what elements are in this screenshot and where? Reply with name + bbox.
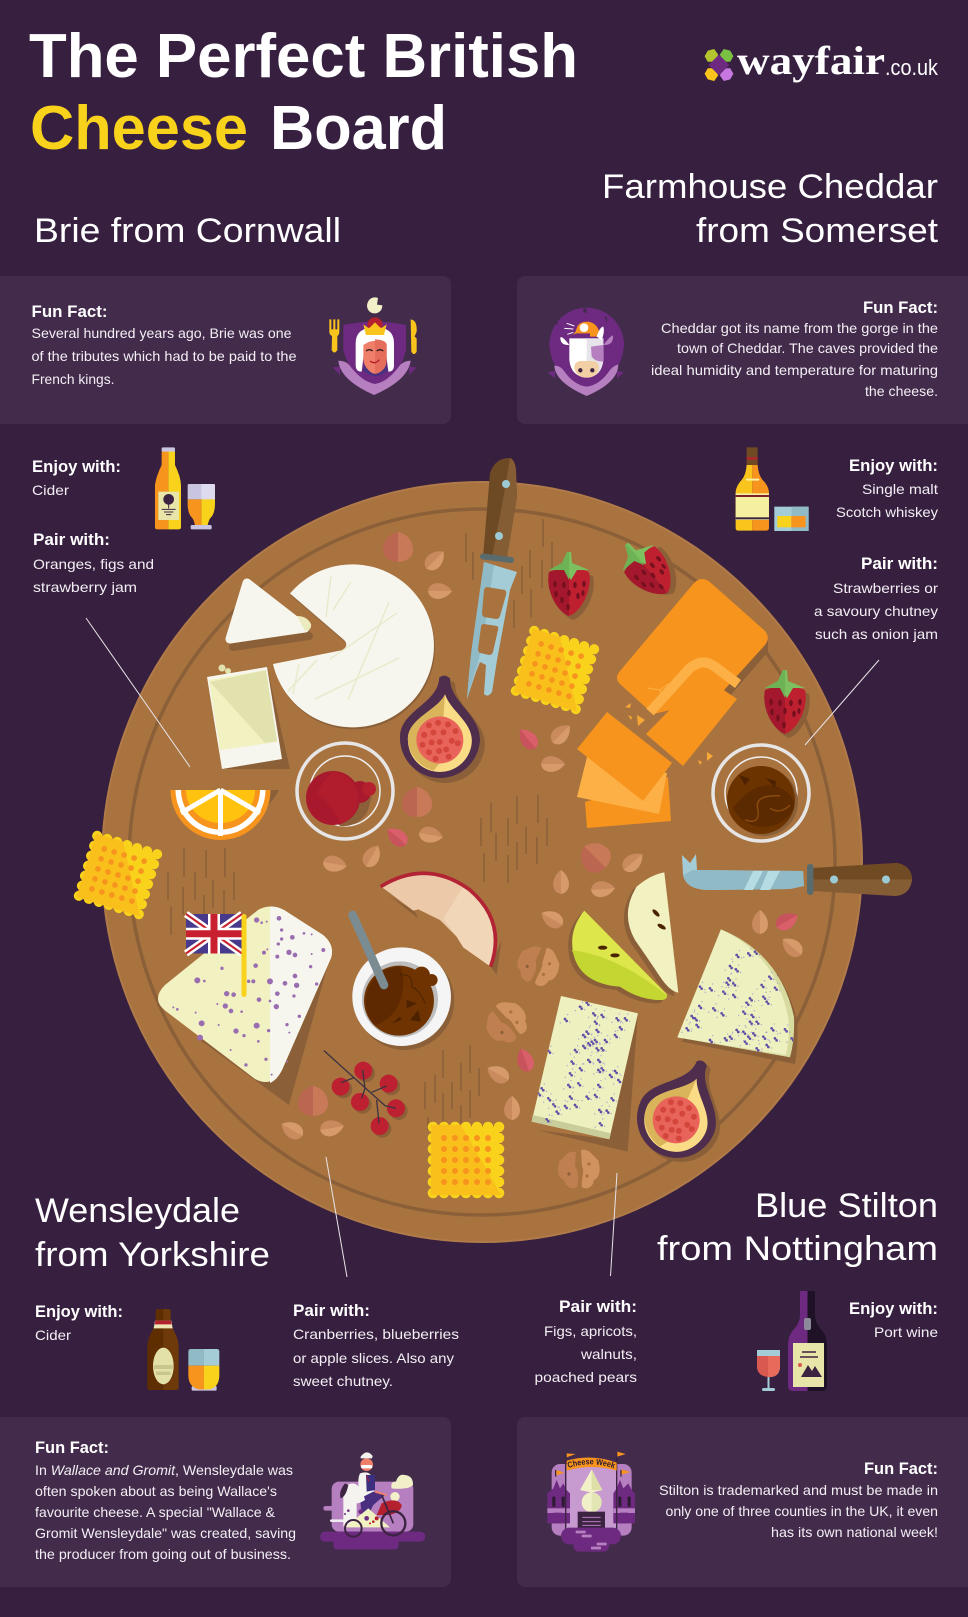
icon: cider bottle and glass <box>155 447 215 529</box>
fun fact text: cheddar: Cheddar got its name from the gorge in the <box>661 320 938 336</box>
chutney glass <box>713 745 809 841</box>
enjoy: stilton <box>849 1299 938 1340</box>
fun fact text: cheddar: town of Cheddar. The caves provided the <box>677 340 938 356</box>
icon: cheese week: Cheese Week <box>568 1458 616 1468</box>
fun fact text: wensleydale: the producer from going out of business. <box>35 1546 291 1562</box>
enjoy: wensleydale <box>35 1302 123 1343</box>
jam glass <box>297 743 393 839</box>
enjoy: wensleydale: Cider <box>35 1327 71 1343</box>
pair: stilton: Figs, apricots, <box>544 1323 637 1339</box>
fun fact text: wensleydale: In Wallace and Gromit, Wensleydale was <box>35 1462 293 1478</box>
heading: Blue Stilton from Nottingham: Blue Stilton <box>755 1187 938 1225</box>
enjoy / pair: cheddar: Scotch whiskey <box>836 504 938 520</box>
pair: wensleydale <box>293 1301 459 1389</box>
fun fact text: stilton: only one of three counties in the UK, it even <box>666 1503 938 1519</box>
heading: Wensleydale from Yorkshire: from Yorkshire <box>35 1236 270 1274</box>
fun fact text: cheddar <box>651 298 938 399</box>
enjoy / pair: cheddar: such as onion jam <box>815 626 938 642</box>
fun fact text: stilton: has its own national week! <box>771 1524 938 1540</box>
enjoy / pair: brie: Pair with: <box>33 530 110 549</box>
enjoy / pair: cheddar: Single malt <box>862 481 938 497</box>
cheese knife horizontal <box>682 854 912 896</box>
rectangular cheese slice <box>207 664 290 769</box>
enjoy / pair: cheddar: Enjoy with: <box>849 456 938 475</box>
fun fact text: brie: French kings. <box>32 371 114 387</box>
heading: Brie from Cornwall: Brie from Cornwall <box>34 212 341 250</box>
logo: wayfair.co.uk: wayfair <box>737 38 885 83</box>
pair: stilton: poached pears <box>534 1369 637 1385</box>
title: The Perfect British <box>29 22 578 91</box>
fun fact text: brie: Fun Fact: <box>32 302 108 321</box>
heading: Wensleydale from Yorkshire <box>35 1192 270 1274</box>
title: Cheese <box>30 94 248 163</box>
heading: Farmhouse Cheddar from Somerset: from Somerset <box>696 212 939 250</box>
pair: stilton: Pair with: <box>559 1297 637 1316</box>
enjoy / pair: cheddar <box>814 456 938 642</box>
crackers <box>76 628 597 1195</box>
enjoy / pair: cheddar: Pair with: <box>861 554 938 573</box>
enjoy / pair: cheddar: Strawberries or <box>833 580 938 596</box>
panel: stilton fun fact <box>517 1417 968 1587</box>
wensleydale wedge with flag <box>158 906 332 1105</box>
fun fact text: cheddar: ideal humidity and temperature for maturing <box>651 362 938 378</box>
heading: Wensleydale from Yorkshire: Wensleydale <box>35 1192 240 1230</box>
fun fact text: brie: of the tributes which had to be paid to the <box>32 348 297 364</box>
cheese knife vertical <box>467 458 517 699</box>
heading: Blue Stilton from Nottingham <box>657 1187 938 1268</box>
pair: stilton: walnuts, <box>580 1346 637 1362</box>
fun fact text: stilton: Fun Fact: <box>864 1459 938 1478</box>
board <box>102 482 862 1242</box>
brie slice <box>230 583 311 647</box>
pair: wensleydale: Pair with: <box>293 1301 370 1320</box>
fun fact text: wensleydale: often spoken about as being Wallace's <box>35 1483 277 1499</box>
logo: wayfair.co.uk <box>705 38 939 83</box>
stilton wedge <box>677 929 798 1064</box>
nuts scattered on board <box>278 532 806 1188</box>
fun fact text: wensleydale <box>35 1438 296 1562</box>
enjoy / pair: brie: Oranges, figs and <box>33 556 154 572</box>
title: Board <box>270 94 447 163</box>
orange slice <box>170 790 279 840</box>
icon: whisky bottle and tumbler <box>736 447 809 531</box>
fig top <box>397 673 489 786</box>
strawberries <box>548 528 810 738</box>
fun fact text: brie: Several hundred years ago, Brie was one <box>32 325 292 341</box>
pair: stilton <box>534 1297 637 1385</box>
fun fact text: cheddar: the cheese. <box>865 383 938 399</box>
cheddar <box>577 579 768 828</box>
icon: queen crest <box>329 297 417 395</box>
icon: union jack flag <box>186 914 246 997</box>
pair: wensleydale: Cranberries, blueberries <box>293 1326 459 1342</box>
enjoy: wensleydale: Enjoy with: <box>35 1302 123 1321</box>
enjoy / pair: brie: Enjoy with: <box>32 457 121 476</box>
fun fact text: wensleydale: Fun Fact: <box>35 1438 109 1457</box>
fun fact text: wensleydale: Gromit Wensleydale" was created, saving <box>35 1525 296 1541</box>
enjoy: stilton: Port wine <box>874 1324 938 1340</box>
brie wheel <box>273 564 435 729</box>
icon: cheese week <box>547 1452 635 1552</box>
blue veins <box>172 916 325 1076</box>
fun fact text: wensleydale: favourite cheese. A special "Wallace & <box>35 1504 276 1520</box>
cranberries <box>324 1051 408 1138</box>
logo: wayfair.co.uk: .co.uk <box>885 55 939 80</box>
fun fact text: cheddar: Fun Fact: <box>863 298 938 317</box>
enjoy / pair: cheddar: a savoury chutney <box>814 603 938 619</box>
heading: Blue Stilton from Nottingham: from Nottingham <box>657 1230 938 1268</box>
enjoy: stilton: Enjoy with: <box>849 1299 938 1318</box>
enjoy / pair: brie: strawberry jam <box>33 579 137 595</box>
panel: cheddar fun fact <box>517 276 968 424</box>
icon: cow crest <box>548 308 624 396</box>
callout lines <box>86 618 879 1277</box>
apple slice <box>381 873 502 975</box>
pears <box>568 872 678 1003</box>
enjoy / pair: brie <box>32 457 154 595</box>
heading: Farmhouse Cheddar from Somerset <box>602 168 939 250</box>
icon: port bottle and wine glass <box>757 1291 827 1391</box>
chutney bowl with spoon <box>352 915 454 1050</box>
stilton block <box>532 996 638 1152</box>
fig bottom <box>624 1045 743 1175</box>
wood grain <box>168 519 552 1130</box>
pair: wensleydale: sweet chutney. <box>293 1373 393 1389</box>
enjoy / pair: brie: Cider <box>32 482 69 498</box>
title <box>29 22 578 163</box>
panel: brie fun fact <box>0 276 451 424</box>
pair: wensleydale: or apple slices. Also any <box>293 1350 454 1366</box>
fun fact text: brie <box>32 302 297 387</box>
icon: wallace and gromit <box>320 1452 425 1549</box>
heading: Farmhouse Cheddar from Somerset: Farmhouse Cheddar <box>602 168 938 206</box>
panel: wensleydale fun fact <box>0 1417 451 1587</box>
icon: dark cider bottle and glass <box>147 1309 219 1391</box>
fun fact text: stilton <box>659 1459 938 1540</box>
fun fact text: stilton: Stilton is trademarked and must be made in <box>659 1482 938 1498</box>
